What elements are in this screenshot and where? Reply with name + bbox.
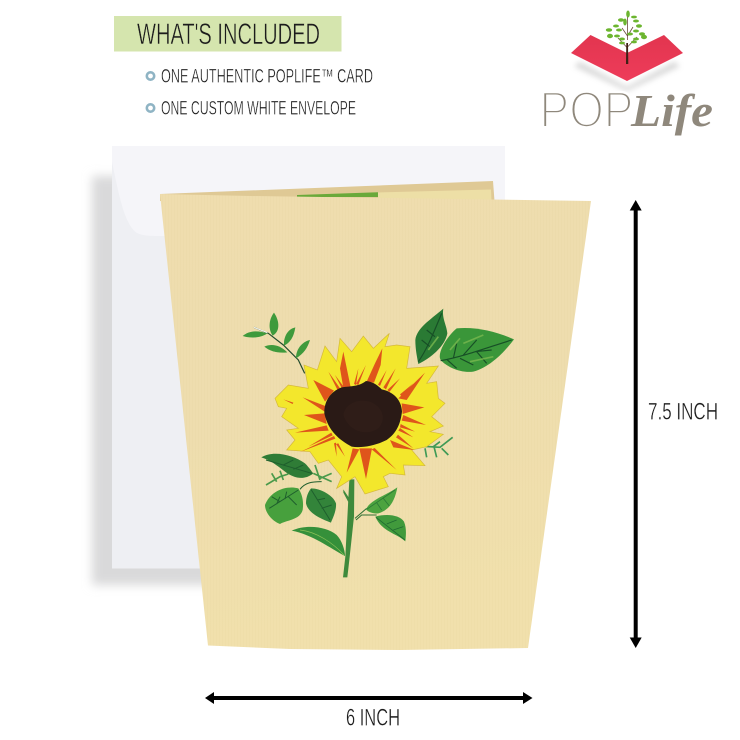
icon: red open book <box>571 35 683 81</box>
illustration: sunflower <box>243 309 514 577</box>
heading: what's included: WHAT'S INCLUDED <box>137 18 320 51</box>
list of included items <box>147 66 373 120</box>
envelope with shadow <box>92 146 505 585</box>
logo wordmark Life: Life <box>630 86 713 136</box>
heading: what's included <box>114 16 342 52</box>
icon: tree <box>606 10 647 64</box>
card back panel <box>160 181 494 201</box>
sprig: lower left <box>266 465 332 485</box>
card front <box>160 194 591 650</box>
logo shadow <box>574 62 680 91</box>
item: white envelope: ONE CUSTOM WHITE ENVELOPE <box>161 98 356 120</box>
arrow: height <box>630 200 642 648</box>
leaf: round centre <box>306 488 336 523</box>
leaves: upper right <box>415 309 514 372</box>
pop-up card <box>160 181 591 650</box>
envelope body <box>112 146 505 568</box>
stem <box>343 479 354 577</box>
item: authentic card <box>147 66 373 88</box>
leaf veins <box>266 460 332 520</box>
logo wordmark POP: POP <box>540 81 634 138</box>
sunflower orange streaks <box>283 348 426 479</box>
sunflower petals <box>275 333 445 494</box>
leaf: upper left of stem <box>261 454 313 478</box>
sunflower centre <box>324 381 402 447</box>
leaf: round left <box>265 487 303 524</box>
item: white envelope <box>147 98 356 120</box>
envelope shadow <box>92 176 222 585</box>
label: 6 inch: 6 INCH <box>346 704 400 732</box>
logo: PopLife <box>540 10 713 138</box>
inner pale strip <box>378 190 492 201</box>
leaf: stem right lower <box>375 515 406 541</box>
stem branch lines <box>355 508 377 520</box>
leaf: stem right upper <box>366 487 397 513</box>
envelope flap <box>112 146 505 236</box>
arrow: width <box>205 692 532 704</box>
item: authentic card: ONE AUTHENTIC POPLIFE™ CARD <box>161 66 373 88</box>
sprig: right <box>418 437 453 457</box>
branch: upper left <box>243 313 310 373</box>
leaf: lower stem left <box>292 527 345 556</box>
inner green leaf strip <box>297 192 378 197</box>
